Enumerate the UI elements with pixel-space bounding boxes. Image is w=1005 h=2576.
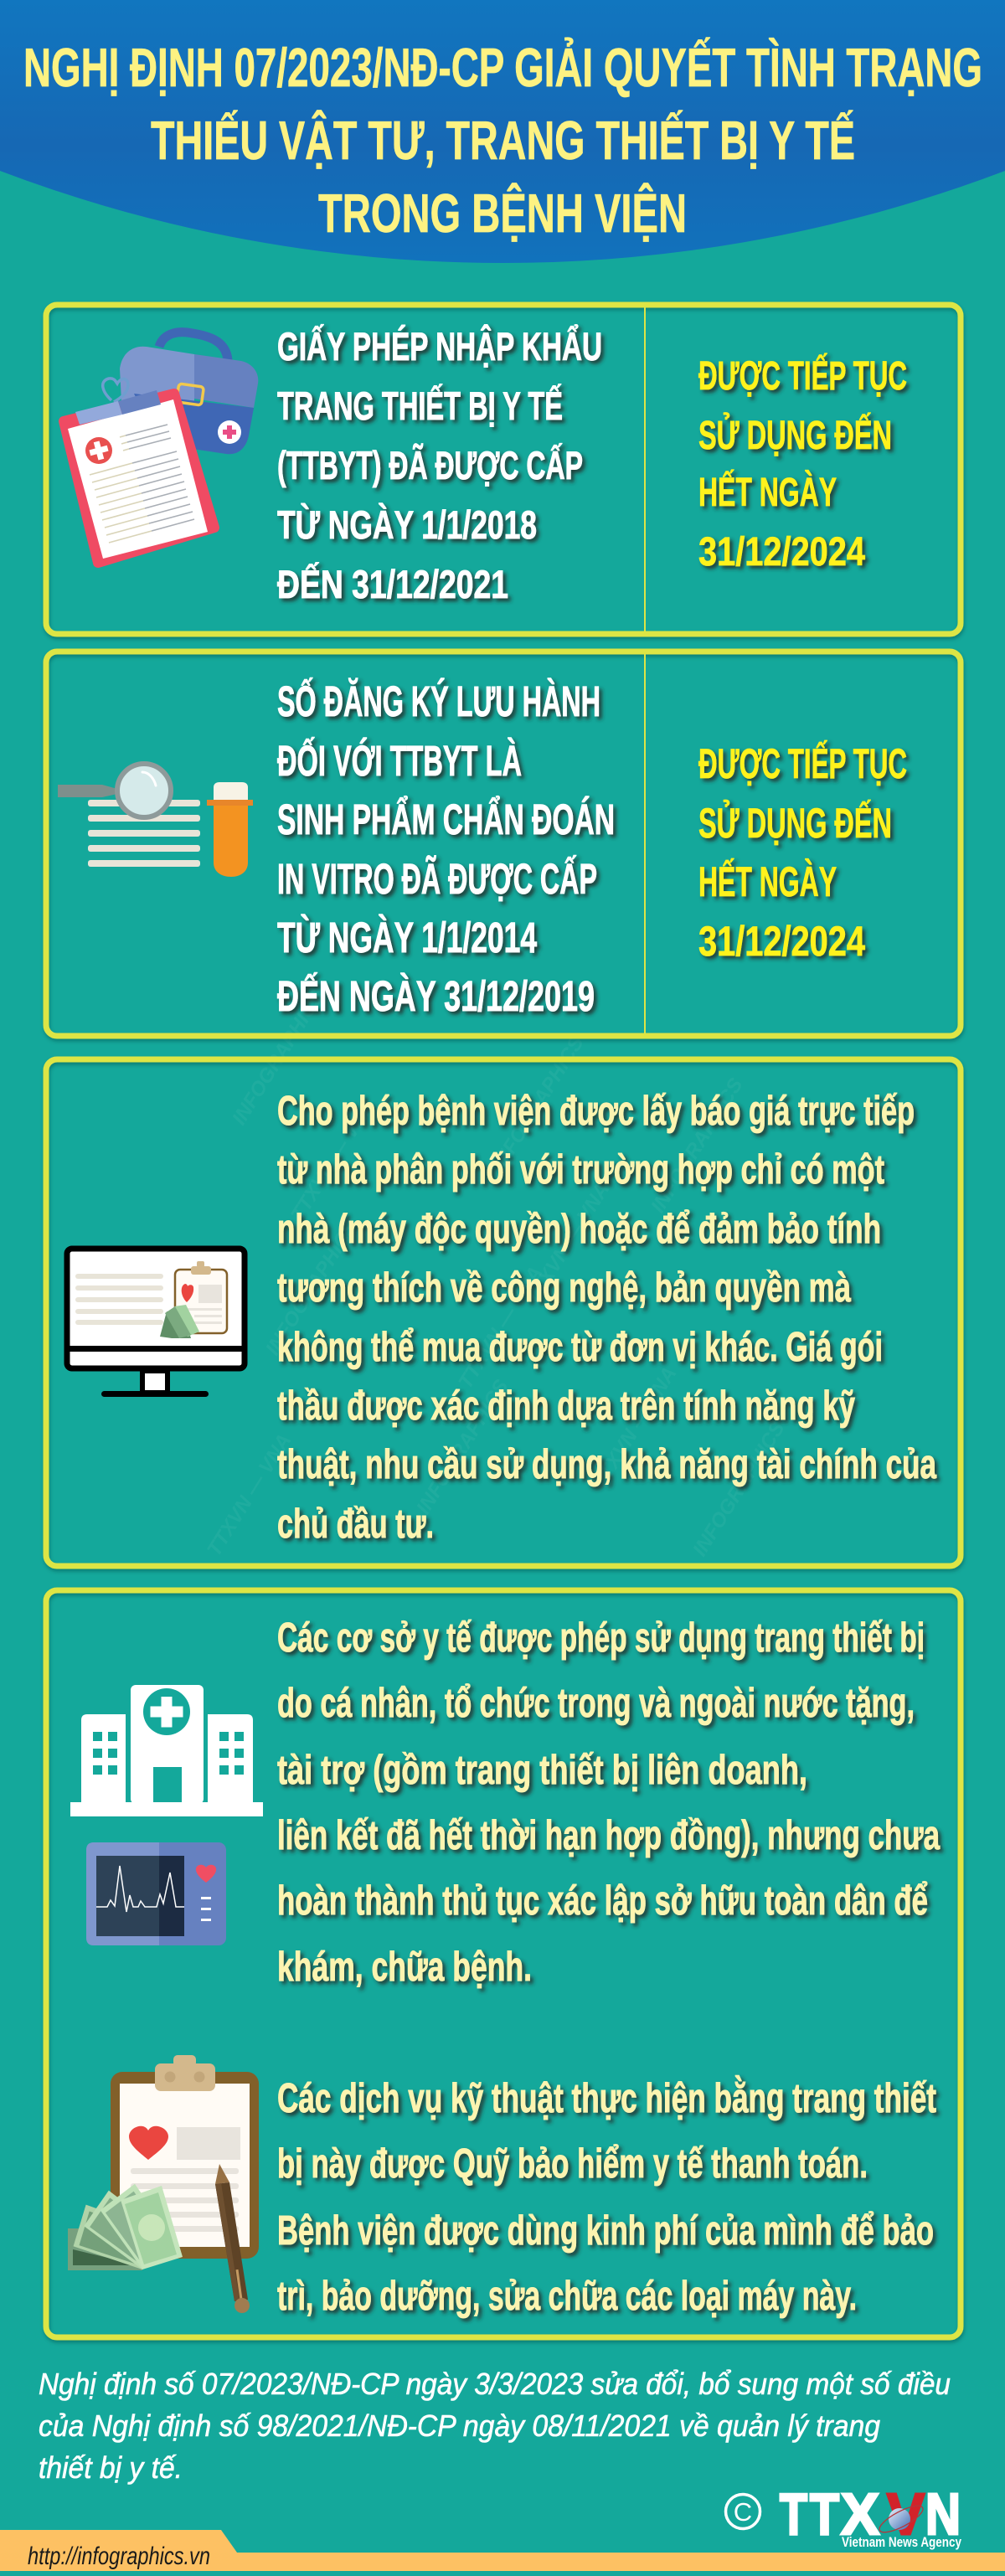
text: validity deadline: HẾT NGÀY (698, 470, 837, 515)
logo: TTXVN: T (780, 2481, 807, 2547)
panel: direct quotation (46, 1059, 961, 1566)
logo: TTXVN: X (841, 2481, 879, 2547)
text: TTXVN — VNA (588, 1363, 681, 1493)
panel: import licences (46, 305, 961, 634)
panel: donated equipment (46, 1590, 961, 2337)
footer band (0, 2530, 1005, 2571)
text: donated equipment rule (277, 1615, 941, 1990)
text: TTXVN — VNA (454, 1263, 547, 1393)
text: validity deadline: HẾT NGÀY (698, 858, 837, 905)
text: validity deadline: 31/12/2024 (698, 530, 865, 574)
text: registration scope (277, 677, 615, 1020)
title: TRONG BỆNH VIỆN (318, 183, 687, 244)
text: registration scope: TỪ NGÀY 1/1/2014 (277, 914, 537, 961)
text: registration scope: IN VITRO ĐÃ ĐƯỢC CẤP (277, 854, 597, 903)
source url: http://infographics.vn (28, 2543, 210, 2570)
logo: TTXVN: V (887, 2481, 925, 2547)
logo: TTXVN: T (810, 2481, 839, 2547)
footnote: Nghị định số 07/2023/NĐ-CP ngày 3/3/2023 sửa đổi, bổ sung một số điều (39, 2367, 951, 2401)
title (23, 37, 982, 244)
text: registration scope: SINH PHẨM CHẨN ĐOÁN (277, 795, 615, 843)
text: direct quotation rule: chủ đầu tư. (277, 1502, 434, 1547)
text: import licence scope: GIẤY PHÉP NHẬP KHẨU (277, 324, 602, 368)
text: donated equipment rule: tài trợ (gồm trang thiết bị liên doanh, (277, 1748, 807, 1793)
text: validity deadline: SỬ DỤNG ĐẾN (698, 412, 892, 458)
footnote: của Nghị định số 98/2021/NĐ-CP ngày 08/11/2021 về quản lý trang (39, 2409, 880, 2443)
panel: registration numbers (46, 652, 961, 1036)
text: TTXVN — VNA (286, 1095, 379, 1225)
header banner (0, 0, 1005, 263)
text: registration scope: ĐỐI VỚI TTBYT LÀ (277, 736, 522, 785)
text: import licence scope (277, 324, 602, 606)
text: registration scope: SỐ ĐĂNG KÝ LƯU HÀNH (277, 677, 600, 725)
text: validity deadline: 31/12/2024 (698, 918, 865, 965)
text: INFOGRAPHICS (228, 987, 329, 1129)
footnote: thiết bị y tế. (39, 2450, 183, 2485)
text: registration scope: ĐẾN NGÀY 31/12/2019 (277, 971, 595, 1020)
text: validity deadline (698, 353, 907, 574)
text: INFOGRAPHICS (487, 1033, 589, 1175)
text: validity deadline: SỬ DỤNG ĐẾN (698, 799, 892, 847)
text: TTXVN — VNA (203, 1430, 296, 1560)
icon: clipboard, money and pencil (62, 2055, 259, 2313)
icon: magnifier and test tube (58, 764, 253, 877)
icon: hospital building (70, 1685, 263, 1816)
icon: heart-rate monitor (86, 1842, 226, 1945)
logo: TTXVN: C (734, 2497, 752, 2527)
text: direct quotation rule (277, 1089, 937, 1547)
icon: medical bag and clipboard (64, 332, 258, 563)
footnote (39, 2367, 951, 2485)
logo: TTXVN: Vietnam News Agency (842, 2534, 961, 2550)
icon: computer monitor (67, 1249, 245, 1397)
text: validity deadline (698, 740, 907, 965)
text: INFOGRAPHICS (261, 1217, 363, 1359)
text: donated equipment rule: khám, chữa bệnh. (277, 1945, 532, 1990)
text: INFOGRAPHICS (647, 1074, 748, 1217)
logo: TTXVN: N (925, 2481, 961, 2547)
text: import licence scope: TỪ NGÀY 1/1/2018 (277, 502, 537, 547)
text: insurance and maintenance rule (277, 2075, 936, 2319)
text: import licence scope: ĐẾN 31/12/2021 (277, 562, 508, 606)
text: TTXVN — VNA (521, 1179, 614, 1309)
text: import licence scope: (TTBYT) ĐÃ ĐƯỢC CẤP (277, 443, 583, 487)
text: INFOGRAPHICS (688, 1418, 790, 1560)
text: INFOGRAPHICS (412, 1376, 513, 1518)
text: import licence scope: TRANG THIẾT BỊ Y TẾ (277, 384, 563, 428)
logo: TTXVN (725, 2481, 961, 2550)
